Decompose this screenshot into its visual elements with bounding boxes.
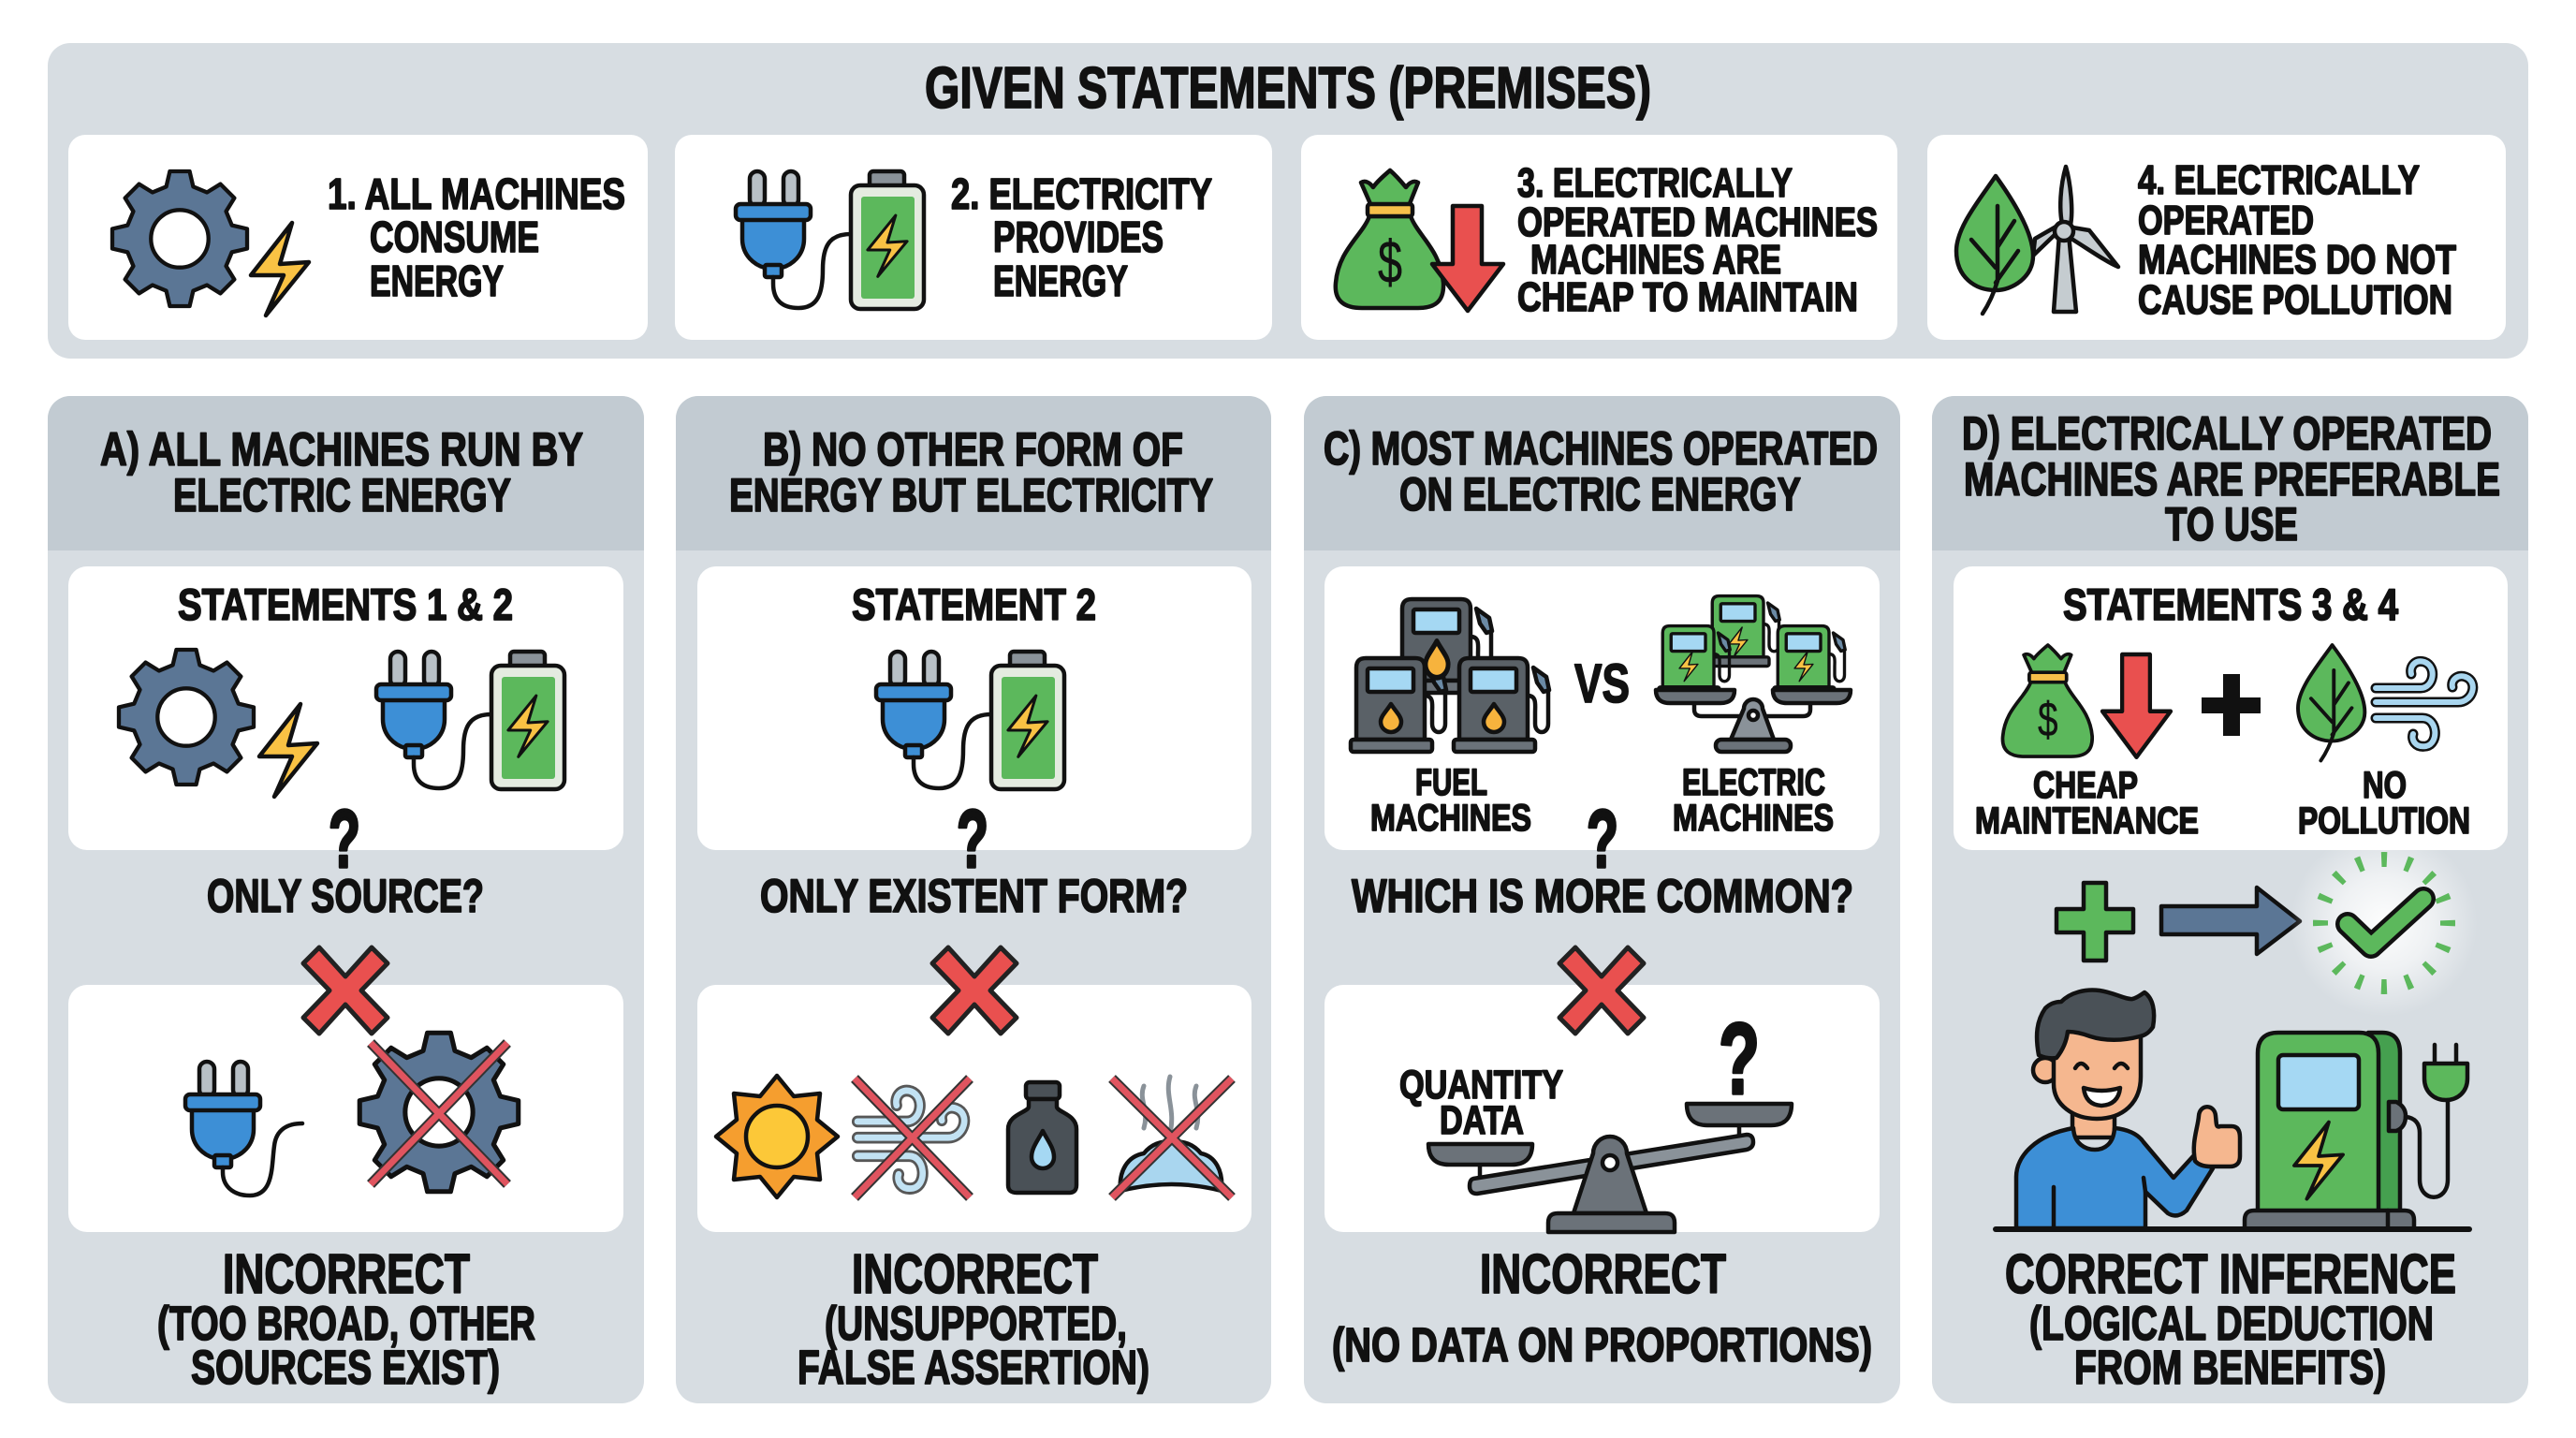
icon: fuel bottle [1008,1082,1076,1193]
text: statement 3 [1517,160,1878,320]
question: only source: ONLY SOURCE? [207,870,484,922]
label: no pollution: NO [2363,765,2407,806]
text: statement 4: MACHINES DO NOT [2138,237,2456,283]
card: statement 2 [675,135,1272,340]
icon: electric pumps on scale [1656,595,1851,752]
icon: sun [716,1076,838,1197]
icon: blue arrow [2161,888,2300,954]
verdict: incorrect: (TOO BROAD, OTHER [157,1297,535,1350]
label: fuel machines: MACHINES [1370,798,1531,839]
icon: red X [303,947,388,1034]
text: statement 2: ENERGY [993,257,1128,305]
heading: option A: ELECTRIC ENERGY [173,469,511,521]
icon: black plus [2202,674,2261,736]
card: statements 1 and 2 [68,566,623,850]
label: VS: VS [1574,653,1630,714]
text: statement 3: MACHINES ARE [1530,237,1781,283]
icon: red X [1559,947,1644,1034]
card: statements 3 and 4 [1954,566,2508,850]
card: statement 1 [68,135,648,340]
text: statement 2: 2. ELECTRICITY [951,169,1212,218]
panel: given statements [48,43,2528,359]
verdict: incorrect: (NO DATA ON PROPORTIONS) [1332,1318,1872,1372]
verdict: incorrect: INCORRECT [852,1243,1098,1305]
label: cheap maintenance: CHEAP [2033,765,2138,806]
icon: plug and battery [376,652,564,789]
label: no pollution [2298,765,2470,842]
label: cheap maintenance [1975,765,2199,842]
card: other energy forms [697,985,1251,1232]
question mark: ? [957,794,988,885]
icon: plug and battery [876,652,1064,789]
label: quantity data: DATA [1440,1098,1524,1143]
card: statement 2 [697,566,1251,850]
card: fuel vs electric [1325,566,1880,850]
text: statement 1: CONSUME [370,213,539,261]
verdict: incorrect: SOURCES EXIST) [191,1341,500,1394]
verdict: correct inference: FROM BENEFITS) [2074,1341,2386,1394]
text: statement 3: CHEAP TO MAINTAIN [1517,274,1858,320]
label: electric machines: ELECTRIC [1682,762,1825,803]
verdict: incorrect: (UNSUPPORTED, [825,1297,1127,1350]
card: missing quantity data [1325,985,1880,1232]
text: statement 3: 3. ELECTRICALLY [1517,160,1793,206]
label: quantity data: QUANTITY [1399,1063,1563,1108]
text: statement 4: OPERATED [2138,198,2314,243]
card: statement 4 [1927,135,2506,340]
verdict: incorrect: INCORRECT [1480,1243,1726,1305]
label: quantity data [1399,1063,1563,1143]
text: statement 2: PROVIDES [993,213,1164,261]
verdict: incorrect [798,1243,1149,1394]
ground line [1996,1226,2469,1232]
icon: red X [932,947,1017,1034]
icon: money bag and down arrow [2002,645,2171,757]
icon: tilted balance scale [1428,1104,1792,1232]
icon: green plus [2056,883,2133,961]
verdict: incorrect: FALSE ASSERTION) [798,1341,1149,1394]
icon: money bag and down arrow [1336,170,1503,311]
heading: option C: ON ELECTRIC ENERGY [1399,468,1801,521]
question mark: ? [329,794,360,885]
heading: option B: B) NO OTHER FORM OF [763,423,1183,476]
question: which is more common: WHICH IS MORE COMMON? [1352,870,1853,922]
text: statement 4: CAUSE POLLUTION [2138,277,2452,323]
text: statement 1: ENERGY [370,257,504,305]
icon: crossed-out gear [359,1033,519,1192]
panel: option C [1304,396,1900,1403]
icon: crossed-out gas flame [1112,1077,1232,1197]
heading: option C: C) MOST MACHINES OPERATED [1324,422,1878,475]
verdict: correct inference [2005,1243,2456,1394]
icon: gear and bolt [119,650,317,797]
label: electric machines: MACHINES [1673,798,1834,839]
panel: option B [676,396,1271,1403]
card: counterexample [68,985,623,1232]
heading: option C [1324,422,1878,521]
text: statement 4 [2138,157,2456,323]
heading: option D: TO USE [2165,498,2298,550]
heading: option B [729,423,1213,521]
heading: option A: A) ALL MACHINES RUN BY [100,423,583,476]
label: fuel machines: FUEL [1415,762,1487,803]
verdict: correct inference: (LOGICAL DEDUCTION [2029,1297,2434,1350]
card: statement 3 [1301,135,1897,340]
icon: question mark on scale: ? [1719,1002,1760,1115]
text: statement 3: OPERATED MACHINES [1517,199,1878,245]
icon: gear and bolt [112,171,309,315]
heading: option B: ENERGY BUT ELECTRICITY [729,469,1213,521]
icon: leaf and wind [2298,645,2473,760]
icon: glowing check mark [2291,829,2478,1017]
label: statement 2: STATEMENT 2 [852,580,1096,629]
text: statement 1: 1. ALL MACHINES [328,169,625,218]
icon: wind turbine and leaf [1956,167,2118,314]
panel: option A [48,396,644,1403]
verdict: incorrect [1332,1243,1872,1372]
verdict: incorrect: INCORRECT [223,1243,470,1305]
question: only existent form: ONLY EXISTENT FORM? [760,870,1188,922]
verdict: incorrect [157,1243,535,1394]
text: statement 2 [951,169,1212,305]
heading: option A [100,423,583,521]
illustration: smiling man with thumbs up [2016,990,2240,1228]
icon: plug with cord [185,1062,302,1196]
text: statement 1 [328,169,625,305]
icon: fuel pumps [1351,599,1549,752]
text: statement 4: 4. ELECTRICALLY [2138,157,2420,203]
question mark: ? [1587,794,1618,885]
panel: option D [1932,396,2528,1403]
label: no pollution: POLLUTION [2298,800,2470,842]
label: statements 1 & 2: STATEMENTS 1 & 2 [178,580,513,629]
label: cheap maintenance: MAINTENANCE [1975,800,2199,842]
icon: crossed-out wind [855,1078,970,1197]
icon: plug and battery [736,171,924,309]
label: statements 3 & 4: STATEMENTS 3 & 4 [2063,580,2398,629]
title: GIVEN STATEMENTS (PREMISES) [925,56,1651,121]
label: electric machines [1673,762,1834,839]
illustration: electric charging station [2245,1033,2467,1229]
label: fuel machines [1370,762,1531,839]
heading: option D [1962,407,2500,550]
